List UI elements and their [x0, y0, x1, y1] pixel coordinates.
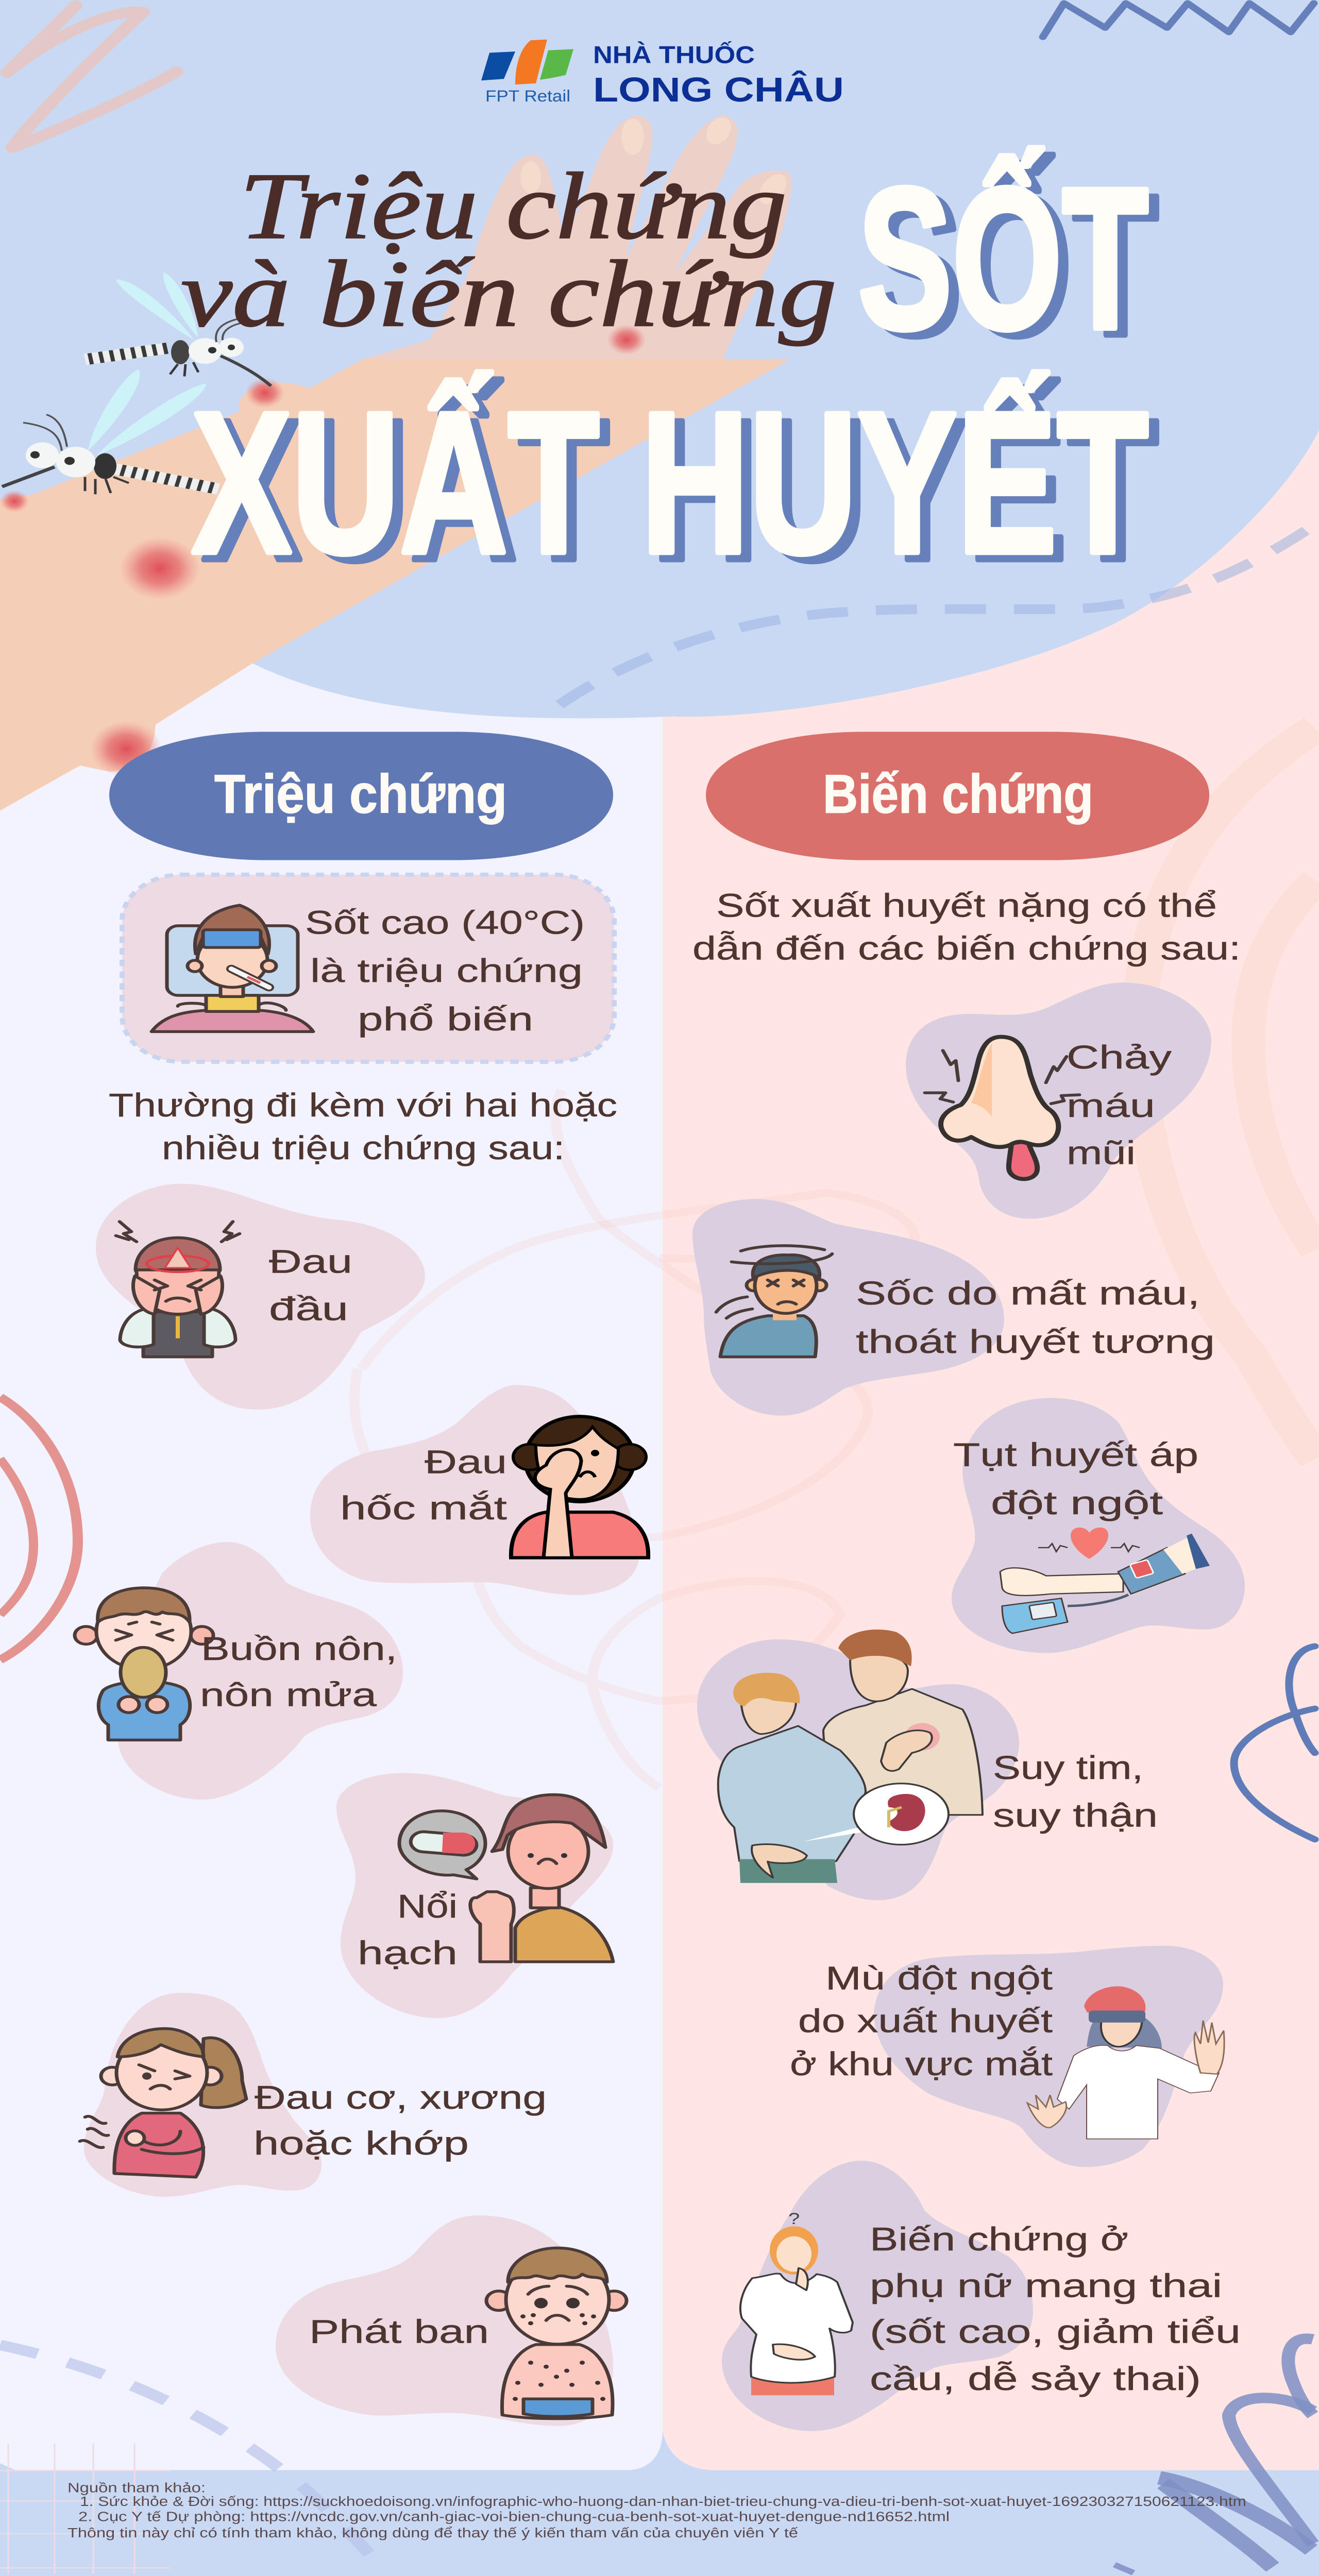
- icon: dizzy man: [716, 1246, 832, 1357]
- complication: sudden low blood pressure: đột ngột: [991, 1484, 1163, 1521]
- icon: mosquito lower: [2, 369, 218, 494]
- symptom: muscle and joint pain: [80, 1993, 547, 2197]
- complication: heart and kidney failure: [697, 1630, 1158, 1900]
- title: SỐT: [858, 146, 1159, 378]
- footer: references: 1. Sức khỏe & Đời sống: https://suckhoedoisong.vn/infographic-who-huong-dan-nhan-biet-trieu-chung-va-dieu-tri-benh-sot-xuat-huyet-169230327150621123.htm: [80, 2494, 1246, 2509]
- logo: FPT Retail and Long Châu: FPT Retail: [485, 87, 570, 105]
- complication: sudden blindness: Mù đột ngột: [825, 1959, 1053, 1997]
- icon: blindfolded person: [1027, 1986, 1224, 2139]
- symptom: headache: đầu: [269, 1290, 348, 1327]
- panel: complications column background: [663, 402, 1319, 2470]
- panel: high fever callout: là triệu chứng: [310, 952, 583, 989]
- icon: feverish person in bed: [151, 905, 313, 1031]
- heading pill: Biến chứng: [706, 732, 1209, 860]
- complication: shock: Sốc do mất máu,: [856, 1275, 1200, 1312]
- symptom: nausea: nôn mửa: [200, 1676, 377, 1714]
- logo: FPT Retail and Long Châu: [481, 40, 844, 109]
- text: accompanying symptoms intro: nhiều triệu chứng sau:: [162, 1129, 565, 1166]
- symptom: swollen lymph nodes: [336, 1773, 613, 2018]
- icon: man holding chest: [823, 1630, 983, 1815]
- decorative dashed curve under title: [560, 526, 1314, 705]
- heading pill: Triệu chứng: Triệu chứng: [214, 764, 507, 824]
- decorative grid bottom left: [0, 2444, 170, 2574]
- symptom: eye socket pain: [310, 1385, 648, 1595]
- title: script line 1: Triệu chứng: [240, 153, 787, 259]
- symptom: skin rash: Phát ban: [309, 2313, 489, 2350]
- complication: pregnancy: Biến chứng ở: [870, 2221, 1128, 2258]
- decorative blue scribble on right edge: [1234, 1646, 1315, 1839]
- complication: shock: thoát huyết tương: [856, 1323, 1215, 1360]
- logo: FPT Retail and Long Châu: LONG CHÂU: [593, 70, 844, 109]
- text: accompanying symptoms intro: Thường đi kèm với hai hoặc: [109, 1087, 617, 1124]
- decorative blue flower bottom right: [1114, 2338, 1313, 2573]
- symptom: swollen lymph nodes: Nổi: [397, 1888, 458, 1925]
- footer: references: Nguồn tham khảo:: [67, 2481, 206, 2496]
- decorative scribble top right: [1043, 3, 1314, 37]
- complication: sudden low blood pressure: Tụt huyết áp: [953, 1436, 1198, 1473]
- symptom: muscle and joint pain: hoặc khớp: [253, 2125, 469, 2162]
- text: complications intro: Sốt xuất huyết nặng có thể: [716, 887, 1217, 924]
- footer: references: 2. Cục Y tế Dự phòng: https://vncdc.gov.vn/canh-giac-voi-bien-chung-cua-benh-sot-xuat-huyet-dengue-nd16652.html: [78, 2510, 950, 2524]
- footer: references: Thông tin này chỉ có tính tham khảo, không dùng để thay thế ý kiến tham vấn của chuyên viên Y tế: [67, 2526, 799, 2540]
- text: complications intro: [692, 887, 1241, 967]
- text: complications intro: dẫn đến các biến chứng sau:: [692, 929, 1241, 967]
- icon: woman covering eye: [511, 1416, 648, 1557]
- top blue blob: [0, 0, 1319, 718]
- heading pill: Biến chứng: Biến chứng: [823, 764, 1093, 824]
- complication: pregnancy: phụ nữ mang thai: [870, 2267, 1222, 2304]
- icon: person with rash and pill bubble: [399, 1794, 613, 1962]
- decorative pink rings on left edge: [0, 1397, 78, 1660]
- symptom: headache: [96, 1184, 425, 1410]
- complication: sudden blindness: [790, 1946, 1224, 2167]
- heading pill: Triệu chứng: [109, 732, 613, 860]
- panel: symptoms column background: [0, 402, 663, 2470]
- icon: woman with body ache: [80, 2029, 246, 2177]
- complication: nosebleed: [906, 982, 1211, 1219]
- icon: child with rash: [486, 2248, 627, 2419]
- icon: pregnant woman: [740, 2210, 853, 2395]
- icon: mosquito upper: [85, 273, 271, 386]
- complication: pregnancy: cầu, dễ sảy thai): [870, 2360, 1201, 2397]
- title: script line 2: và biến chứng: [181, 241, 837, 346]
- footer: references: [67, 2481, 1246, 2540]
- panel: high fever callout: Sốt cao (40°C): [305, 904, 585, 941]
- panel: high fever callout: [122, 875, 614, 1062]
- decorative scribble top left: [7, 6, 177, 148]
- complication: nosebleed: mũi: [1067, 1134, 1136, 1171]
- icon: headache person: [116, 1222, 240, 1357]
- complication: heart and kidney failure: Suy tim,: [993, 1749, 1143, 1786]
- complication: sudden blindness: ở khu vực mắt: [790, 2045, 1053, 2082]
- icon: bleeding nose: [925, 1037, 1079, 1179]
- symptom: skin rash: [276, 2215, 627, 2426]
- complication: nosebleed: máu: [1067, 1087, 1155, 1124]
- symptom: eye socket pain: Đau: [425, 1443, 507, 1480]
- icon: pregnant woman: ?: [788, 2210, 800, 2228]
- complication: pregnancy: [722, 2161, 1241, 2431]
- icon: nauseous child with bag: [75, 1588, 213, 1740]
- icon: man holding back with kidney callout: [718, 1673, 949, 1883]
- symptom: muscle and joint pain: Đau cơ, xương: [255, 2079, 547, 2116]
- symptom: eye socket pain: hốc mắt: [340, 1489, 507, 1527]
- complication: heart and kidney failure: suy thận: [993, 1797, 1158, 1834]
- decorative dashed arc bottom left: [0, 2345, 381, 2568]
- symptom: swollen lymph nodes: hạch: [358, 1934, 458, 1971]
- symptom: nausea: [75, 1542, 403, 1800]
- illustration: hand with rash: [0, 114, 792, 810]
- icon: blood pressure monitor: [1000, 1528, 1210, 1633]
- complication: pregnancy: (sốt cao, giảm tiểu: [870, 2313, 1241, 2350]
- symptom: nausea: Buồn nôn,: [201, 1630, 397, 1667]
- text: accompanying symptoms intro: [109, 1087, 617, 1166]
- panel: high fever callout: phổ biến: [358, 1001, 533, 1038]
- complication: shock: [692, 1199, 1215, 1416]
- symptom: headache: Đau: [269, 1243, 352, 1280]
- complication: sudden blindness: do xuất huyết: [798, 2002, 1053, 2039]
- complication: sudden low blood pressure: [952, 1398, 1245, 1653]
- logo: FPT Retail and Long Châu: NHÀ THUỐC: [593, 42, 755, 69]
- complication: nosebleed: Chảy: [1067, 1039, 1172, 1076]
